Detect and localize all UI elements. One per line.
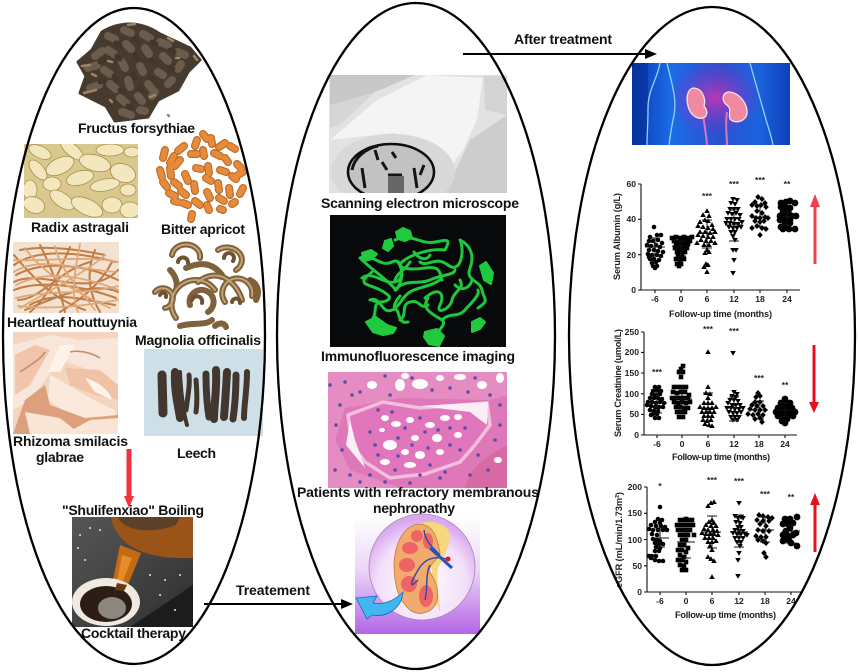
label: radix astragali: Radix astragali <box>31 219 129 235</box>
chart: serum creatinine: 250 <box>625 327 639 337</box>
chart: serum creatinine: 100 <box>625 389 639 399</box>
label: after treatment: After treatment <box>514 31 612 47</box>
chart: serum creatinine: 0 <box>680 439 685 449</box>
image: rhizoma smilacis glabrae <box>13 332 118 434</box>
chart: serum creatinine: 150 <box>625 368 639 378</box>
label: shulifenxiao boiling: "Shulifenxiao" Boiling <box>62 502 204 518</box>
label: heartleaf houttuynia: Heartleaf houttuynia <box>7 314 137 330</box>
arrow: after treatment <box>463 49 657 59</box>
chart: serum albumin: 24 <box>782 294 792 304</box>
label: magnolia officinalis: Magnolia officinalis <box>135 332 261 348</box>
chart: serum albumin: 0 <box>679 294 684 304</box>
label: nephropathy: nephropathy <box>373 500 455 516</box>
chart: serum creatinine <box>613 324 797 462</box>
significance stars <box>652 324 789 390</box>
axes <box>641 332 797 438</box>
label: cocktail therapy: Cocktail therapy <box>81 625 186 641</box>
outline: middle ellipse <box>277 3 555 669</box>
significance stars: *** <box>652 367 663 377</box>
significance stars: *** <box>702 191 713 201</box>
significance stars: ** <box>788 492 795 502</box>
chart: egfr: 24 <box>786 596 796 606</box>
label: rhizoma smilacis glabrae: Rhizoma smilacis <box>13 433 128 449</box>
label: patients with refractory membranous: Patients with refractory membranous <box>297 484 539 500</box>
axis title y: Serum Creatinine (umol/L) <box>613 329 623 437</box>
chart: egfr: 18 <box>760 596 770 606</box>
label: immunofluorescence imaging: Immunofluorescence imaging <box>321 348 515 364</box>
chart: egfr: 50 <box>632 561 642 571</box>
axes <box>644 487 803 595</box>
outline: left ellipse <box>3 8 265 664</box>
significance stars: *** <box>703 324 714 334</box>
chart: egfr: 12 <box>734 596 744 606</box>
axis title y: Serum Albumin (g/L) <box>612 193 622 280</box>
label: glabrae line: glabrae <box>36 449 84 465</box>
chart: egfr: 200 <box>628 482 642 492</box>
axis title x: Follow-up time (months) <box>669 309 772 319</box>
chart: serum creatinine: 0 <box>634 430 639 440</box>
error bars <box>647 386 794 421</box>
chart: serum albumin: 0 <box>631 285 636 295</box>
image: fructus forsythiae <box>78 24 200 121</box>
scatter points <box>647 197 796 273</box>
image: heartleaf houttuynia <box>13 242 119 313</box>
axis title x: Follow-up time (months) <box>672 452 770 462</box>
arrow: albumin increases <box>810 194 820 264</box>
label: treatement: Treatement <box>236 582 310 598</box>
panel: outcomes after treatment <box>569 7 855 665</box>
chart: serum albumin: -6 <box>651 294 659 304</box>
significance stars: *** <box>729 179 740 189</box>
label: bitter apricot: Bitter apricot <box>161 221 245 237</box>
chart: serum creatinine: 50 <box>629 409 639 419</box>
chart: egfr: 6 <box>710 596 715 606</box>
chart: serum albumin: 40 <box>626 214 636 224</box>
significance stars <box>658 475 795 502</box>
outline: right ellipse <box>569 7 855 665</box>
significance stars: *** <box>754 373 765 383</box>
image: leech <box>144 349 263 436</box>
image: radix astragali <box>24 144 138 218</box>
chart: egfr <box>614 475 803 620</box>
chart: egfr: 0 <box>637 587 642 597</box>
image: histology stain <box>328 372 507 488</box>
significance stars: *** <box>734 476 745 486</box>
chart: egfr: 100 <box>628 535 642 545</box>
arrow: creatinine decreases <box>809 345 819 413</box>
image: scanning electron micrograph <box>329 75 507 193</box>
scatter points <box>649 502 797 577</box>
axis title x: Follow-up time (months) <box>675 610 776 620</box>
significance stars: ** <box>782 380 789 390</box>
chart: serum creatinine: 200 <box>625 347 639 357</box>
chart: serum albumin: 60 <box>626 179 636 189</box>
chart: egfr: -6 <box>656 596 664 606</box>
significance stars: *** <box>755 175 766 185</box>
image: cocktail therapy pot and bowl <box>72 510 193 627</box>
axes <box>638 184 800 293</box>
error bars <box>645 205 796 256</box>
significance stars: *** <box>760 489 771 499</box>
axis title y: eGFR (mL/min/1.73m²) <box>614 492 624 588</box>
label: scanning electron microscope: Scanning electron microscope <box>321 195 519 211</box>
chart: serum albumin <box>612 175 800 319</box>
panel: herbal ingredients and cocktail therapy <box>3 8 265 664</box>
arrow: treatement <box>204 599 353 609</box>
image: kidney illustration <box>355 514 480 634</box>
chart: serum creatinine: 12 <box>729 439 739 449</box>
chart: serum creatinine: 24 <box>780 439 790 449</box>
significance stars: *** <box>707 475 718 485</box>
label: leech: Leech <box>177 445 216 461</box>
chart: egfr: 0 <box>684 596 689 606</box>
arrow: egfr increases <box>810 493 820 552</box>
chart: serum creatinine: 18 <box>754 439 764 449</box>
image: kidneys in torso <box>632 60 790 145</box>
chart: serum creatinine: -6 <box>653 439 661 449</box>
image: magnolia officinalis <box>155 245 258 327</box>
chart: egfr: 150 <box>628 508 642 518</box>
scatter points <box>647 352 795 426</box>
significance stars: * <box>658 481 662 491</box>
significance stars: ** <box>784 179 791 189</box>
panel: kidney pathology <box>277 3 555 669</box>
chart: serum albumin: 18 <box>755 294 765 304</box>
arrow: red boiling arrow <box>124 449 134 508</box>
significance stars <box>702 175 791 201</box>
chart: serum albumin: 12 <box>729 294 739 304</box>
image: bitter apricot <box>160 134 243 219</box>
label: fructus forsythiae: Fructus forsythiae <box>78 120 195 136</box>
significance stars: *** <box>729 326 740 336</box>
error bars <box>651 515 800 558</box>
image: immunofluorescence <box>330 215 506 347</box>
chart: serum albumin: 20 <box>626 250 636 260</box>
chart: serum creatinine: 6 <box>706 439 711 449</box>
chart: serum albumin: 6 <box>705 294 710 304</box>
